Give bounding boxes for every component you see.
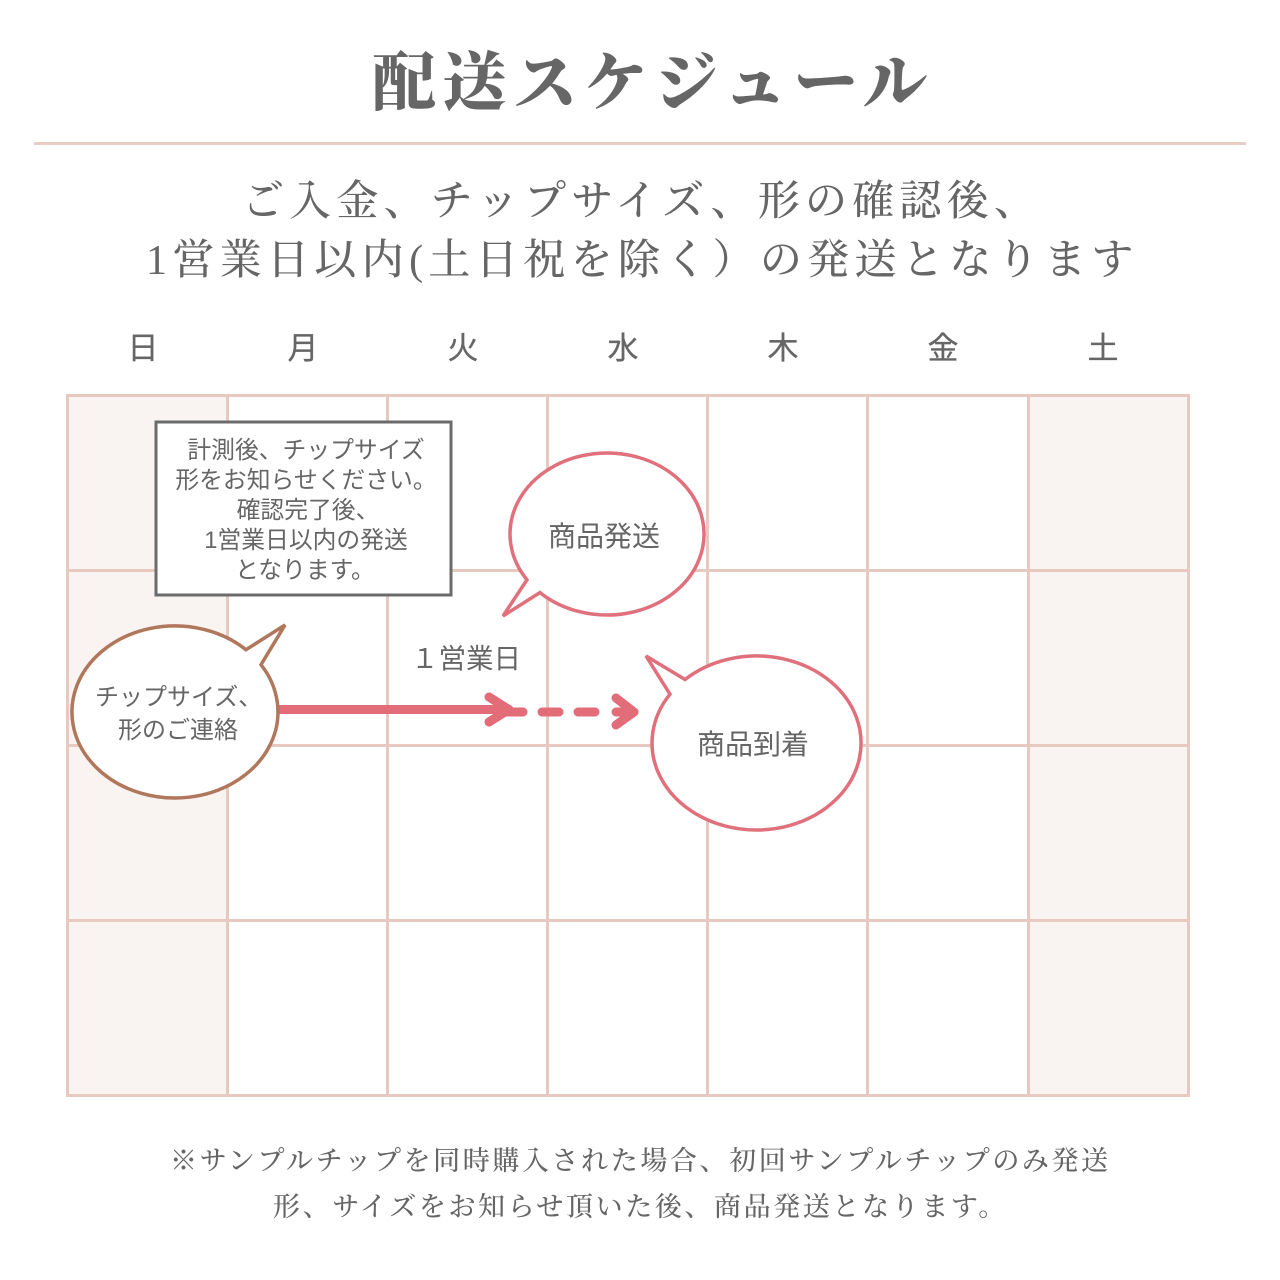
label: 1 business day: １営業日 <box>411 643 521 674</box>
solid arrow <box>275 697 509 722</box>
weekday header <box>128 331 1118 366</box>
footnote: 形、サイズをお知らせ頂いた後、商品発送となります。 <box>273 1192 1008 1222</box>
bubble: shipped <box>503 453 704 616</box>
weekday header: 火 <box>448 331 478 366</box>
weekday header: 木 <box>768 331 798 366</box>
bubble: contact: 形のご連絡 <box>118 717 238 744</box>
note box: 形をお知らせください。 <box>175 467 437 494</box>
bubble: delivered <box>646 656 861 830</box>
weekday header: 金 <box>928 331 958 366</box>
note box <box>156 422 451 595</box>
subtitle: ご入金、チップサイズ、形の確認後、 <box>242 178 1041 225</box>
footnote <box>170 1146 1111 1222</box>
bubble: shipped: 商品発送 <box>548 521 660 552</box>
footnote: ※サンプルチップを同時購入された場合、初回サンプルチップのみ発送 <box>170 1146 1111 1176</box>
note box: となります。 <box>235 557 375 584</box>
dashed arrow <box>500 698 634 725</box>
title: 配送スケジュール <box>372 48 934 119</box>
subtitle <box>146 178 1139 284</box>
weekday header: 水 <box>608 331 638 366</box>
calendar grid <box>67 395 1189 1096</box>
note box: 1営業日以内の発送 <box>204 527 408 554</box>
bubble: contact: チップサイズ、 <box>95 684 262 711</box>
weekday header: 日 <box>128 331 158 366</box>
note box: 確認完了後、 <box>237 497 379 524</box>
bubble: delivered: 商品到着 <box>697 729 809 760</box>
subtitle: 1営業日以内(土日祝を除く）の発送となります <box>146 238 1139 284</box>
bubble: contact <box>72 625 285 798</box>
note box: 計測後、チップサイズ <box>187 437 425 464</box>
weekday header: 土 <box>1088 331 1118 366</box>
weekday header: 月 <box>288 331 318 366</box>
